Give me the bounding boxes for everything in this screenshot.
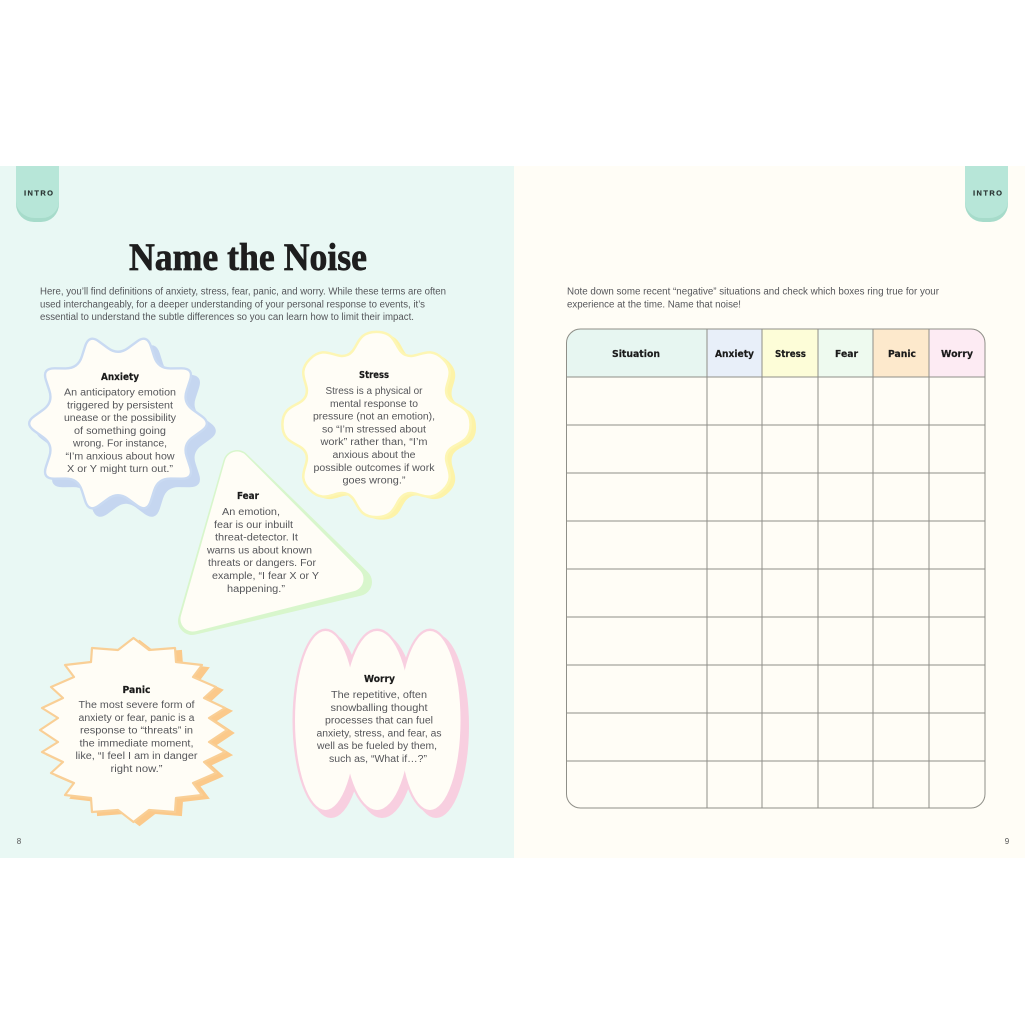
text: fear definition: fear is our inbuilt	[214, 520, 293, 531]
heading: fear: Fear	[237, 491, 259, 502]
title: Name the Noise	[129, 236, 367, 279]
instructions text block: experience at the time. Name that noise!	[567, 299, 741, 310]
text: fear definition: warns us about known	[206, 545, 312, 556]
table header	[566, 329, 985, 377]
text: worry definition	[316, 690, 442, 765]
text: stress definition: pressure (not an emotion),	[313, 412, 435, 423]
instructions text block	[567, 286, 940, 310]
icon: worry cloud shape	[292, 628, 469, 818]
intro text block: essential to understand the subtle differences so you can learn how to limit their impact.	[40, 312, 414, 323]
page number: 9: 9	[1005, 837, 1010, 846]
intro text block: Here, you’ll find definitions of anxiety, stress, fear, panic, and worry. While these terms are often	[40, 286, 446, 298]
tab: intro right	[965, 166, 1008, 222]
text: anxiety definition: wrong. For instance,	[72, 439, 167, 450]
text: fear definition	[206, 507, 319, 595]
text: fear definition: threat-detector. It	[215, 533, 298, 544]
text: panic definition	[76, 700, 198, 775]
table header: Worry	[941, 349, 973, 360]
text: stress definition: Stress is a physical or	[326, 386, 423, 397]
text: panic definition: The most severe form of	[78, 700, 195, 711]
icon: anxiety star shape	[29, 339, 215, 516]
text: worry definition: The repetitive, often	[331, 690, 427, 701]
table grid	[566, 329, 985, 808]
table header: Situation	[612, 349, 660, 360]
heading: worry: Worry	[364, 674, 395, 685]
text: worry definition: processes that can fuel	[325, 716, 433, 727]
table header: Anxiety	[715, 349, 754, 360]
icon: fear triangle shape	[192, 464, 358, 621]
text: stress definition: so “I’m stressed about	[322, 424, 426, 435]
text: anxiety definition: “I’m anxious about how	[66, 451, 175, 462]
text: anxiety definition	[64, 388, 176, 475]
panel: right page	[514, 166, 1025, 858]
icon: panic burst shape	[40, 638, 233, 825]
text: stress definition: anxious about the	[332, 450, 416, 461]
text: panic definition: right now.”	[110, 764, 162, 775]
text: fear definition: example, “I fear X or Y	[212, 571, 319, 582]
text: stress definition	[313, 386, 436, 487]
callout: fear	[192, 464, 358, 621]
tab: intro left: INTRO	[24, 188, 53, 198]
callout: anxiety	[29, 339, 215, 516]
page number: 8: 8	[17, 837, 22, 846]
tab: intro left	[16, 166, 59, 222]
text: anxiety definition: triggered by persistent	[67, 400, 173, 411]
table header: Fear	[835, 349, 858, 360]
text: worry definition: well as be fueled by them,	[316, 741, 437, 752]
text: panic definition: the immediate moment,	[80, 738, 194, 749]
text: anxiety definition: unease or the possibility	[64, 413, 176, 424]
table header: Panic	[888, 349, 916, 360]
text: anxiety definition: X or Y might turn out.”	[67, 464, 173, 475]
text: panic definition: like, “I feel I am in danger	[76, 751, 198, 762]
callout: worry	[292, 628, 469, 818]
intro text block	[40, 286, 446, 323]
text: fear definition: threats or dangers. For	[208, 558, 317, 569]
heading: panic: Panic	[122, 685, 151, 696]
text: fear definition: An emotion,	[222, 507, 280, 518]
intro text block: used interchangeably, for a deeper understanding of your personal response to events, it’s	[40, 299, 425, 310]
text: panic definition: anxiety or fear, panic is a	[78, 713, 195, 724]
text: fear definition: happening.”	[227, 584, 285, 595]
text: stress definition: possible outcomes if work	[314, 463, 436, 474]
heading: stress: Stress	[359, 370, 389, 381]
text: anxiety definition: of something going	[74, 426, 166, 437]
text: worry definition: such as, “What if…?”	[329, 754, 427, 765]
text: stress definition: work” rather than, “I’m	[319, 437, 428, 448]
tab: intro right: INTRO	[973, 188, 1002, 198]
callout: stress	[282, 332, 476, 520]
text: worry definition: anxiety, stress, and fear, as	[316, 728, 442, 739]
text: stress definition: mental response to	[330, 399, 418, 410]
text: worry definition: snowballing thought	[330, 703, 428, 714]
text: anxiety definition: An anticipatory emotion	[64, 388, 176, 398]
icon: stress flower shape	[282, 332, 476, 520]
text: panic definition: response to “threats” in	[80, 726, 193, 737]
callout: panic	[40, 638, 233, 825]
table header: Stress	[775, 349, 806, 360]
table: situations checklist	[566, 329, 985, 808]
panel: left page	[0, 166, 514, 858]
heading: anxiety: Anxiety	[101, 372, 139, 383]
instructions text block: Note down some recent “negative” situations and check which boxes ring true for your	[567, 286, 940, 298]
text: stress definition: goes wrong.”	[342, 476, 406, 487]
